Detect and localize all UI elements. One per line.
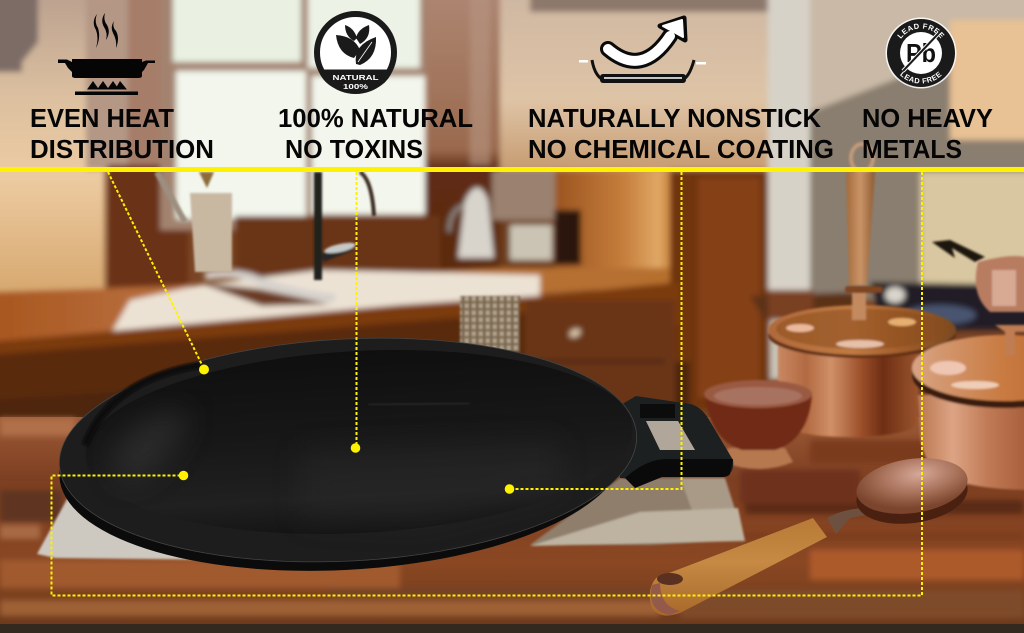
copper pots <box>768 144 1024 490</box>
heading: naturally nonstick no chemical coating: NATURALLY NONSTICK <box>528 105 822 133</box>
yellow divider line <box>0 167 1024 172</box>
towel under pan <box>37 478 745 560</box>
icon: lead free badge <box>886 18 956 88</box>
icon: natural 100% badge: NATURAL <box>332 73 379 82</box>
callout: naturally nonstick <box>505 172 682 494</box>
heading: naturally nonstick no chemical coating <box>528 105 834 164</box>
callout: even heat distribution <box>108 172 209 374</box>
heading: 100% natural no toxins: 100% NATURAL <box>278 105 473 133</box>
callout: 100% natural <box>351 172 360 453</box>
icon: lead free badge: LEAD FREE <box>900 71 942 84</box>
wooden spoon <box>650 451 971 616</box>
callout: no heavy metals <box>52 172 922 596</box>
copper bowl <box>704 380 812 469</box>
heading: even heat distribution <box>30 105 214 164</box>
heading: no heavy metals <box>862 105 993 164</box>
heading: even heat distribution: DISTRIBUTION <box>30 136 214 164</box>
wooden table <box>0 417 1024 633</box>
heading: even heat distribution: EVEN HEAT <box>30 105 174 133</box>
icon: natural 100% badge: 100% <box>343 84 369 91</box>
heading: naturally nonstick no chemical coating: NO CHEMICAL COATING <box>528 136 834 164</box>
icon: lead free badge: Pb <box>906 38 936 68</box>
cast iron pan <box>54 324 733 585</box>
icon: pan on flame <box>58 13 155 95</box>
heading: 100% natural no toxins: NO TOXINS <box>285 136 423 164</box>
icon: lead free badge: LEAD FREE <box>897 23 944 39</box>
icon: natural 100% badge <box>317 14 394 92</box>
pan handle <box>612 396 733 479</box>
heading: no heavy metals: NO HEAVY <box>862 105 993 133</box>
icon: nonstick arrow and tray <box>579 18 706 83</box>
heading: no heavy metals: METALS <box>862 136 962 164</box>
heading: 100% natural no toxins <box>278 105 473 164</box>
